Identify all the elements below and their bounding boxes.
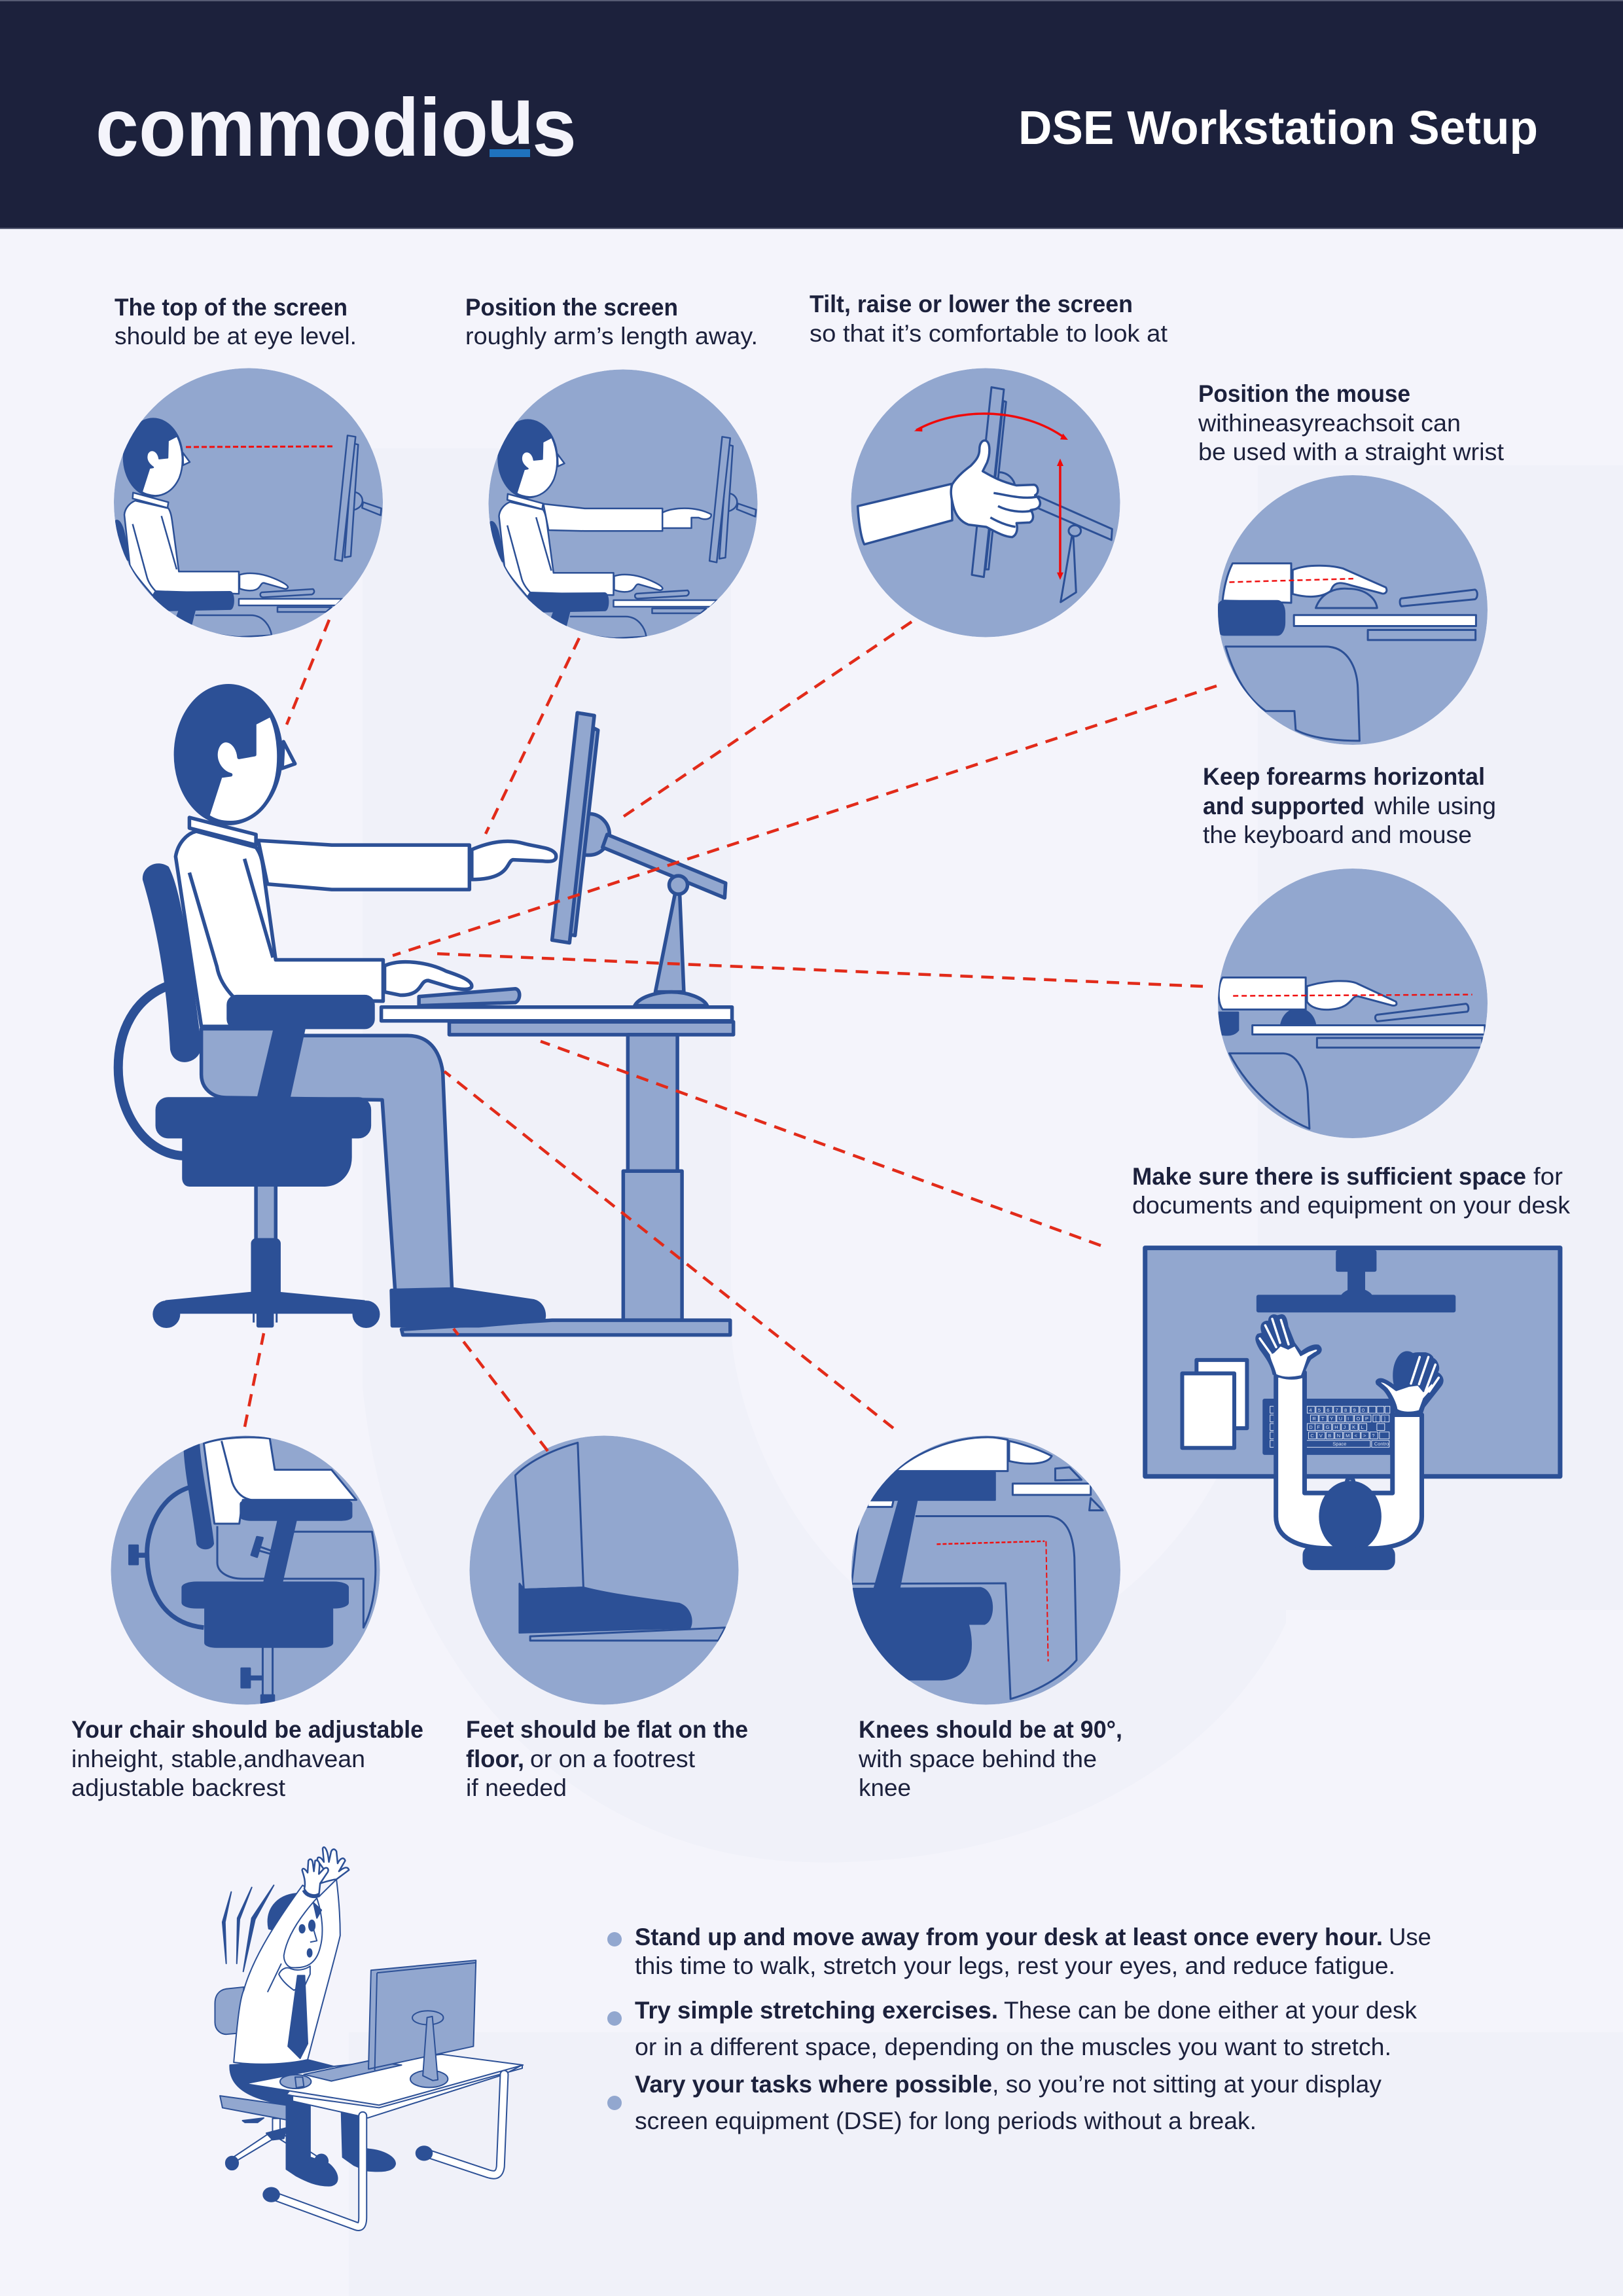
background watermark: large faint U — [349, 448, 1623, 2296]
leg, shoe and footrest — [515, 1443, 725, 1641]
circle background — [111, 1436, 380, 1704]
motion lines — [223, 1885, 274, 1971]
connector: mouse — [393, 686, 1217, 956]
text: keep forearms horizontal: the keyboard and mouse — [1203, 821, 1472, 848]
keyboard from above: CVBNM<>? — [1310, 1433, 1375, 1439]
keyboard from above: Space — [1332, 1441, 1346, 1446]
seated figure looking at screen — [115, 419, 382, 637]
text: feet flat: floor, — [466, 1746, 524, 1772]
panel: knees 90 degrees circle — [851, 1436, 1120, 1704]
forearm level line — [1229, 579, 1353, 582]
monitor — [368, 1960, 476, 2087]
monitor arm — [603, 834, 726, 898]
documents — [1182, 1360, 1247, 1448]
right hand from above — [1376, 1353, 1443, 1415]
text: chair adjustable: adjustable backrest — [71, 1774, 286, 1801]
nose — [1347, 1479, 1353, 1484]
far leg and shoe — [342, 2112, 395, 2171]
bullet three: , so you’re not sitting at your display — [992, 2071, 1382, 2098]
desk — [382, 1007, 734, 1335]
seated leg close-up — [851, 1437, 1103, 1699]
text: keep forearms horizontal — [1203, 763, 1496, 848]
backrest — [145, 865, 200, 1060]
bullet list — [607, 1924, 1431, 2134]
keyboard from above: 4567890 — [1309, 1407, 1364, 1413]
shirt lines — [189, 859, 273, 999]
red height arrow — [1057, 459, 1063, 580]
text: top of the screen — [115, 294, 357, 350]
left hand from above — [1256, 1314, 1321, 1379]
chair back support — [118, 986, 185, 1156]
connector: feet — [454, 1329, 548, 1451]
text: feet flat: Feet should be flat on the — [466, 1716, 748, 1743]
text: feet flat: if needed — [466, 1774, 567, 1801]
panel: mouse position circle — [1217, 475, 1488, 745]
monitor from above — [1258, 1252, 1454, 1310]
circle background — [851, 368, 1120, 637]
bullet one — [607, 1924, 1431, 1979]
torso — [175, 831, 383, 1026]
text: keep forearms horizontal: while using — [1374, 793, 1496, 819]
connector: chair — [245, 1333, 264, 1427]
connector: desk space — [541, 1041, 1101, 1246]
desk legs — [263, 2074, 504, 2227]
chair from above — [1304, 1548, 1393, 1568]
keyboard — [304, 2061, 402, 2081]
monitor arm hub — [568, 814, 609, 855]
panel: feet flat circle — [470, 1436, 738, 1704]
raised hand right — [317, 1847, 349, 1884]
text: chair adjustable: inheight, stable,andhavean — [71, 1746, 365, 1772]
bullet three: Vary your tasks where possible — [635, 2071, 992, 2098]
forearm — [858, 484, 952, 545]
text: chair adjustable: Your chair should be adjustable — [71, 1716, 423, 1743]
bullet one: this time to walk, stretch your legs, rest your eyes, and reduce fatigue. — [635, 1952, 1395, 1979]
raised hand left — [302, 1859, 329, 1897]
extended arm and hand — [543, 504, 711, 531]
desk surface — [1145, 1248, 1560, 1477]
mouse from above — [1395, 1353, 1419, 1398]
panel: tilt screen circle — [851, 368, 1120, 637]
text: position the mouse — [1198, 380, 1505, 465]
text: position the mouse: Position the mouse — [1198, 380, 1410, 407]
head with hair — [175, 686, 295, 823]
bullet two: Try simple stretching exercises. — [635, 1997, 998, 2024]
main illustration: seated worker at desk — [118, 686, 734, 1335]
forearm level line — [1233, 995, 1472, 996]
connector: eye level — [287, 620, 329, 725]
bullet one: Use — [1389, 1924, 1431, 1950]
keyboard — [419, 989, 520, 1006]
text: sufficient space: Make sure there is sufficient space — [1132, 1163, 1526, 1190]
chair seat — [157, 1099, 369, 1185]
forearm, hand, keyboard, desk — [1218, 977, 1485, 1128]
shoe — [391, 1289, 544, 1326]
connector: knees — [444, 1071, 893, 1428]
bullet two: These can be done either at your desk — [1004, 1997, 1417, 2024]
text: knees 90 degrees: Knees should be at 90°, — [859, 1716, 1122, 1743]
circle background — [851, 1436, 1120, 1704]
text: position the screen: Position the screen — [465, 294, 678, 321]
text: tilt the screen: so that it’s comfortable to look at — [810, 320, 1168, 347]
text: position the mouse: withineasyreachsoit can — [1198, 410, 1461, 437]
typing hand — [385, 962, 472, 996]
90 degree knee marker — [936, 1541, 1044, 1544]
circle background — [1218, 475, 1488, 745]
text: tilt the screen: Tilt, raise or lower the screen — [810, 291, 1133, 317]
hand gripping the screen — [951, 440, 1040, 537]
monitor — [552, 713, 598, 943]
bullet three: screen equipment (DSE) for long periods without a break. — [635, 2108, 1257, 2134]
desk top — [245, 2054, 523, 2105]
circle background — [114, 368, 383, 637]
panel: arm's length circle — [488, 369, 758, 639]
text: top of the screen: should be at eye level. — [115, 323, 357, 350]
panel: chair adjustable circle — [111, 1436, 380, 1705]
face — [284, 1898, 322, 1967]
head from above — [1321, 1482, 1380, 1551]
text: sufficient space: for — [1533, 1163, 1563, 1190]
chair base — [226, 2118, 323, 2170]
text: position the mouse: be used with a straight wrist — [1198, 439, 1505, 465]
connector: tilt screen — [623, 622, 912, 817]
armpit fold — [268, 1964, 281, 1992]
connector: arm's length — [486, 638, 579, 834]
forearm, hand, mouse, desk — [1217, 564, 1477, 741]
extended hand — [472, 841, 556, 880]
seated figure — [490, 420, 756, 638]
keyboard from above: Contro — [1374, 1441, 1389, 1446]
text: sufficient space — [1132, 1163, 1571, 1219]
bullet two: or in a different space, depending on the muscles you want to stretch. — [635, 2034, 1391, 2060]
text: sufficient space: documents and equipment on your desk — [1132, 1192, 1571, 1219]
text: top of the screen: The top of the screen — [115, 294, 348, 321]
keyboard from above — [1264, 1401, 1393, 1453]
keyboard from above: RTYUIOP[] — [1312, 1416, 1385, 1422]
panel: forearms horizontal circle — [1218, 869, 1488, 1138]
chair seat — [220, 2096, 287, 2120]
extended arm — [259, 840, 469, 889]
collar — [189, 817, 256, 845]
keyboard from above: DFGHJKL — [1309, 1424, 1364, 1430]
connector: forearms — [435, 954, 1203, 986]
panel: eye level circle — [114, 368, 383, 637]
text: feet flat: or on a footrest — [530, 1746, 696, 1772]
circle background — [488, 369, 758, 639]
text: feet flat — [466, 1716, 748, 1801]
logo: commodious: u — [487, 71, 534, 162]
text: tilt the screen — [810, 291, 1168, 347]
text: knees 90 degrees: knee — [859, 1774, 911, 1801]
mouse — [280, 2075, 311, 2089]
stretching worker illustration — [215, 1847, 523, 2227]
chair and seated figure close-up — [130, 1437, 376, 1705]
bullet one: Stand up and move away from your desk at least once every hour. — [635, 1924, 1383, 1950]
red tilt arrow — [914, 414, 1068, 440]
text: knees 90 degrees — [858, 1716, 1122, 1801]
near leg and trousers — [230, 2060, 338, 2186]
circle background — [1218, 869, 1488, 1138]
text: chair adjustable — [71, 1716, 423, 1801]
bullet three — [607, 2071, 1382, 2134]
top view of desk — [1145, 1248, 1560, 1568]
hair — [268, 1893, 314, 1934]
eye level line — [186, 446, 335, 447]
adjustment knobs — [130, 1545, 138, 1564]
text: position the screen — [465, 294, 758, 350]
tie — [288, 1975, 308, 2058]
bullet two — [607, 1997, 1417, 2060]
arms and shoulders from above — [1276, 1372, 1422, 1549]
logo: commodious: commodio — [96, 82, 488, 173]
monitor stand — [635, 876, 707, 1006]
monitor, arm and stand — [858, 387, 1112, 602]
header band — [0, 0, 1623, 229]
chair column and base — [154, 1185, 378, 1326]
chair back — [215, 1987, 243, 2034]
title: DSE Workstation Setup — [1018, 102, 1538, 154]
collar — [279, 1966, 310, 1990]
cuff — [304, 1890, 319, 1896]
shirt with raised arms — [234, 1879, 340, 2064]
legs — [202, 1029, 452, 1291]
desk front edge — [293, 2065, 522, 2118]
text: keep forearms horizontal: and supported — [1203, 793, 1364, 819]
logo: commodious: s — [532, 82, 577, 173]
text: knees 90 degrees: with space behind the — [858, 1746, 1097, 1772]
text: position the screen: roughly arm’s length away. — [465, 323, 758, 350]
circle background — [470, 1436, 738, 1704]
armrest and stem — [228, 997, 373, 1100]
text: keep forearms horizontal: Keep forearms horizontal — [1203, 763, 1485, 790]
